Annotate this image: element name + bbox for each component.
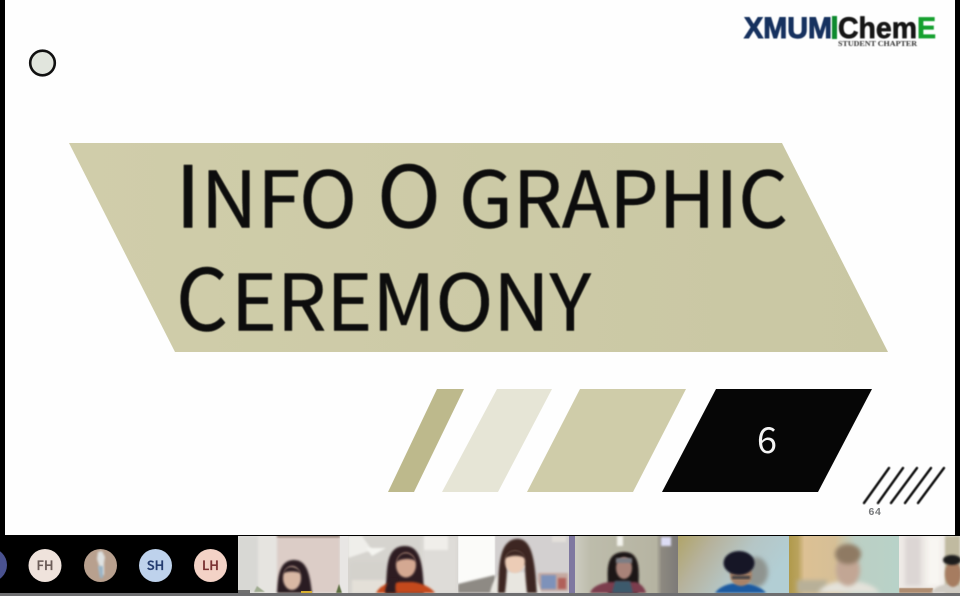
video thumbnail 5 <box>678 536 789 593</box>
title banner <box>69 143 888 352</box>
bottom edge strip <box>0 593 960 596</box>
video thumbnail 1 <box>238 535 348 594</box>
title: Info O Graphic Ceremony: EREMONY <box>231 242 592 354</box>
video thumbnail 7 <box>899 536 960 593</box>
video thumbnail 2 <box>348 536 458 593</box>
decorative bar: olive <box>527 389 686 492</box>
logo: XMUM ChemE Student Chapter <box>744 12 936 48</box>
title: Info O Graphic Ceremony: I <box>175 130 201 252</box>
logo: XMUM ChemE Student Chapter: STUDENT CHAPTER <box>838 39 918 48</box>
section number panel <box>662 389 872 492</box>
avatar: LH: LH <box>202 555 219 574</box>
avatar: photo <box>84 549 117 582</box>
video thumbnail 4 <box>569 536 678 593</box>
title: Info O Graphic Ceremony: NFO <box>201 138 357 250</box>
logo: XMUM ChemE Student Chapter: E <box>917 12 936 45</box>
logo: XMUM ChemE Student Chapter: Chem <box>838 12 917 45</box>
avatar: SH <box>139 549 172 582</box>
avatar: cropped participant <box>0 551 7 579</box>
title: Info O Graphic Ceremony: O <box>377 130 441 252</box>
icon: slide circle marker <box>30 51 55 75</box>
title: Info O Graphic Ceremony: GRAPHIC <box>459 138 788 250</box>
slide page number: 64 <box>868 506 881 518</box>
title: Info O Graphic Ceremony: C <box>176 232 228 356</box>
title: Info O Graphic Ceremony <box>175 130 788 356</box>
avatar: LH <box>194 549 227 582</box>
section number panel: 6 <box>757 412 777 464</box>
participant avatars <box>0 548 227 582</box>
decorative bar: dark olive <box>388 389 464 492</box>
avatar: SH: SH <box>147 555 164 574</box>
decorative bar: pale <box>442 389 552 492</box>
logo: XMUM ChemE Student Chapter: XMUM <box>744 12 832 45</box>
avatar: FH <box>28 549 62 582</box>
avatar: FH: FH <box>36 555 54 574</box>
icon: diagonal hatch lines <box>864 468 944 503</box>
video thumbnail 6 <box>789 536 899 593</box>
video thumbnail 3 <box>458 536 569 593</box>
